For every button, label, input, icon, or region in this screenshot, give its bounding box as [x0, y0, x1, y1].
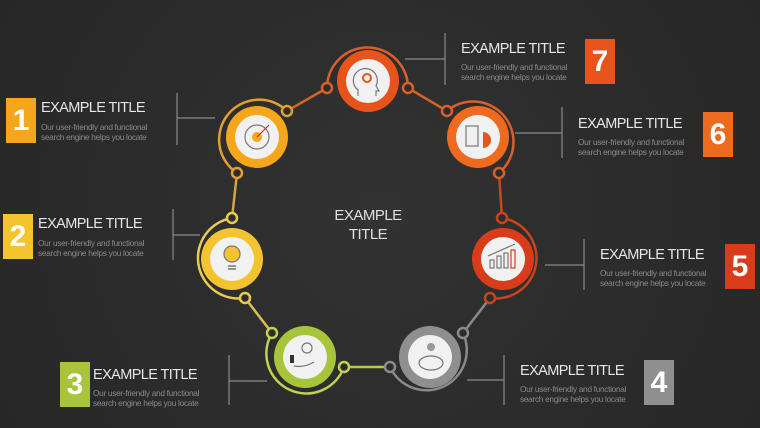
panel 1: search engine helps you locate	[41, 132, 146, 142]
panel 1: 1	[13, 104, 29, 137]
panel 4	[520, 360, 674, 405]
panel 2	[3, 214, 144, 259]
panel 3: EXAMPLE TITLE	[93, 367, 197, 383]
panel 6: 6	[710, 118, 726, 151]
panel 1	[6, 98, 147, 143]
panel 6	[578, 112, 733, 157]
panel 4: search engine helps you locate	[520, 394, 625, 404]
center title	[334, 207, 402, 243]
panel 3: search engine helps you locate	[93, 398, 198, 408]
panel 2: Our user-friendly and functional	[38, 238, 144, 248]
panel 6: search engine helps you locate	[578, 147, 683, 157]
panel 2: EXAMPLE TITLE	[38, 216, 142, 232]
panel 7: EXAMPLE TITLE	[461, 41, 565, 57]
panel 4: EXAMPLE TITLE	[520, 363, 624, 379]
panel 5: 5	[732, 250, 748, 283]
node 6	[447, 106, 509, 168]
panel 3: 3	[67, 368, 83, 401]
callout lines	[173, 33, 584, 405]
panel 2: 2	[10, 220, 26, 253]
node 4	[399, 326, 461, 388]
panel 7	[461, 39, 615, 84]
panel 3: Our user-friendly and functional	[93, 388, 199, 398]
node 7	[337, 50, 399, 112]
node 1	[226, 106, 288, 168]
panel 5: EXAMPLE TITLE	[600, 247, 704, 263]
panel 3	[60, 362, 199, 408]
dots	[227, 83, 507, 372]
panel 5: Our user-friendly and functional	[600, 268, 706, 278]
panel 7: 7	[592, 45, 608, 78]
node 3	[274, 326, 336, 388]
arcs	[198, 48, 536, 394]
center title: EXAMPLE	[334, 207, 402, 224]
panel 4: 4	[651, 366, 667, 399]
panel 1: Our user-friendly and functional	[41, 122, 147, 132]
panel 2: search engine helps you locate	[38, 248, 143, 258]
node 5	[472, 228, 534, 290]
center title: TITLE	[349, 226, 387, 243]
panel 6: EXAMPLE TITLE	[578, 116, 682, 132]
connector lines	[232, 88, 502, 367]
node 2	[201, 228, 263, 290]
panel 1: EXAMPLE TITLE	[41, 100, 145, 116]
panel 7: search engine helps you locate	[461, 72, 566, 82]
panel 7: Our user-friendly and functional	[461, 62, 567, 72]
panel 6: Our user-friendly and functional	[578, 137, 684, 147]
panel 5: search engine helps you locate	[600, 278, 705, 288]
panel 5	[600, 244, 755, 289]
panel 4: Our user-friendly and functional	[520, 384, 626, 394]
